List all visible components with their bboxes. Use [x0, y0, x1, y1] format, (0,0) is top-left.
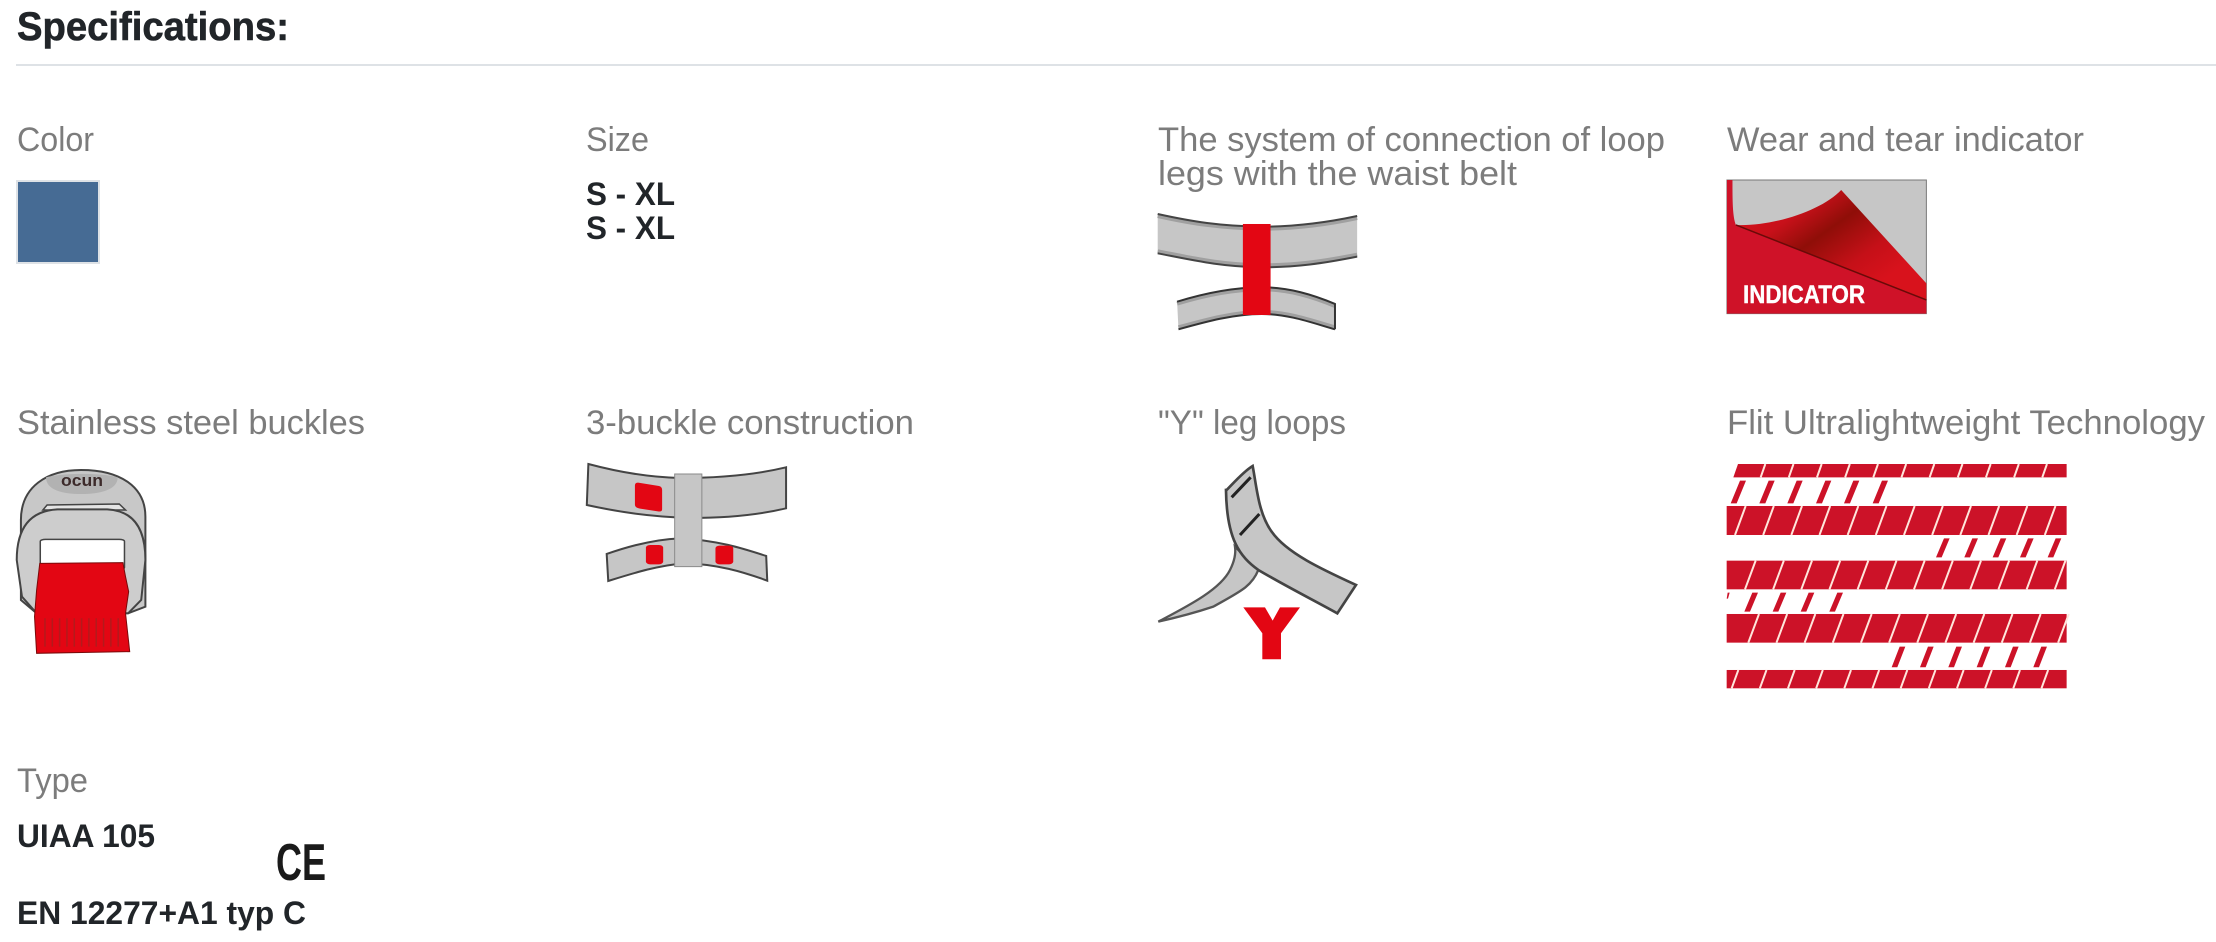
- title: Specifications:: [17, 5, 289, 49]
- spec: Flit technology: [1727, 404, 2205, 688]
- spec: 3-buckle construction: [586, 404, 914, 581]
- spec: color: [17, 121, 99, 263]
- spec: size: [586, 121, 675, 246]
- type value: EN: EN 12277+A1 typ C: [17, 895, 306, 931]
- label: buckles: Stainless steel buckles: [17, 404, 365, 442]
- spec: Y leg loops: [1158, 404, 1356, 659]
- spec: stainless steel buckles: [17, 404, 365, 653]
- label: Flit technology: Flit Ultralightweight Technology: [1727, 404, 2205, 442]
- size values: [586, 176, 675, 246]
- icon: wear and tear indicator: INDICATOR: [1743, 281, 1865, 309]
- size values: S - XL: [586, 176, 675, 212]
- label: wear indicator: Wear and tear indicator: [1727, 121, 2084, 159]
- icon: 3-buckle construction: [587, 464, 786, 581]
- color swatch: [17, 181, 99, 263]
- spec: wear indicator: [1727, 121, 2084, 314]
- icon: Y leg loops: [1158, 466, 1356, 659]
- spec: connection system: [1158, 121, 1665, 329]
- icon: connection of leg loops and waist belt: [1158, 214, 1357, 329]
- label: connection system: legs with the waist belt: [1158, 155, 1518, 193]
- label: Y leg loops: "Y" leg loops: [1158, 404, 1346, 442]
- label: type: Type: [17, 762, 88, 800]
- label: size: Size: [586, 121, 649, 159]
- type value: UIAA: UIAA 105: [17, 818, 155, 854]
- label: connection system: [1158, 121, 1665, 193]
- spec: type: [17, 762, 326, 931]
- label: 3-buckle: 3-buckle construction: [586, 404, 914, 442]
- icon: wear and tear indicator: [1727, 180, 1926, 314]
- icon: Flit rope pattern: [1727, 464, 2069, 688]
- icon: buckle: [17, 470, 145, 653]
- icon: buckle: ocun: [61, 471, 103, 490]
- label: color: Color: [17, 121, 94, 159]
- icon: CE mark: CE: [276, 834, 326, 892]
- size values: S - XL: [586, 210, 675, 246]
- label: connection system: The system of connection of loop: [1158, 121, 1665, 159]
